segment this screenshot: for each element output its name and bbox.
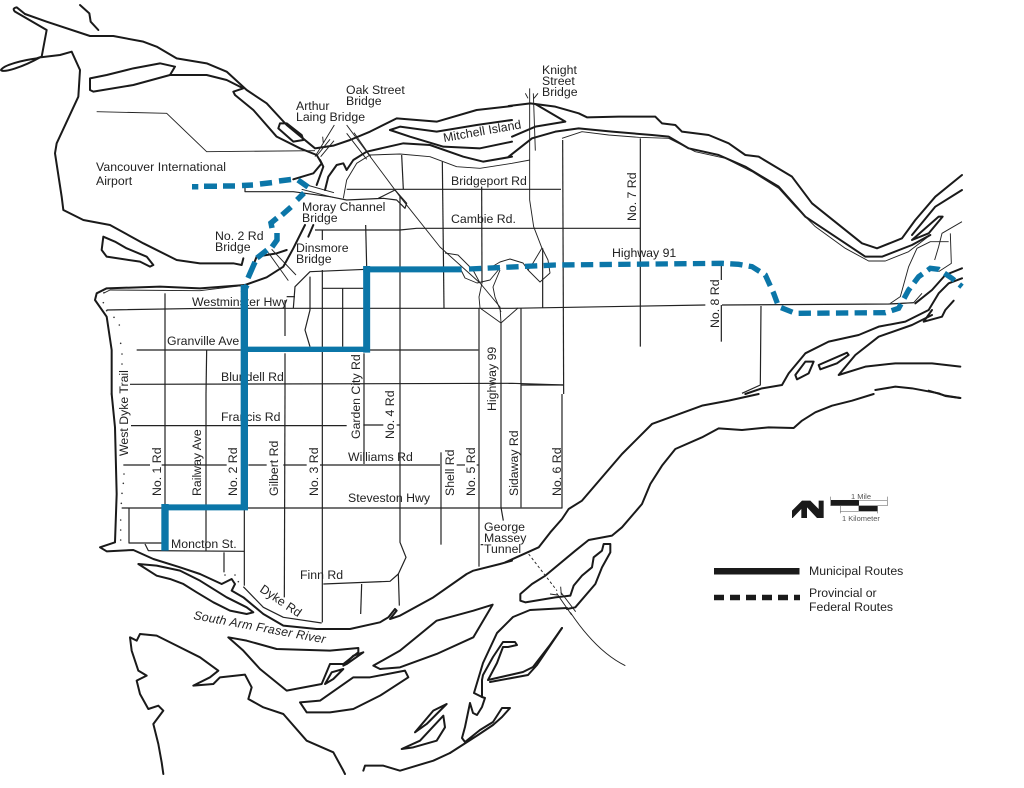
labels: bridges and places: Moray Channel — [302, 200, 385, 214]
labels: horizontal roads: South Arm Fraser River — [192, 608, 328, 647]
labels: bridges and places: No. 2 Rd — [215, 229, 264, 243]
scale labels: 1 Kilometer — [842, 514, 880, 523]
labels: vertical roads: No. 6 Rd — [550, 447, 564, 496]
labels: vertical roads: Gilbert Rd — [267, 440, 281, 496]
municipal routes in blue — [162, 266, 462, 551]
roads: south — [122, 394, 562, 623]
shorelines: north-west — [1, 5, 512, 394]
labels: horizontal roads: Moncton St. — [171, 537, 237, 551]
bridge: Oak Street — [347, 133, 371, 159]
labels: vertical roads: Railway Ave — [190, 429, 204, 496]
provincial or federal routes: Highway 91 — [469, 263, 962, 313]
labels: bridges and places: Oak Street — [346, 83, 405, 97]
labels: bridges and places: Knight — [542, 63, 577, 77]
labels: vertical roads: No. 4 Rd — [383, 390, 397, 439]
labels: bridges and places: George — [484, 520, 525, 534]
roads: north-west — [107, 155, 705, 394]
labels: bridges and places: Bridge — [302, 211, 338, 225]
labels: horizontal roads: Cambie Rd. — [451, 212, 516, 226]
labels: bridges and places: Bridge — [346, 94, 382, 108]
shorelines: south-west — [100, 394, 512, 774]
labels: bridges and places: Laing Bridge — [296, 110, 365, 124]
shorelines: south-east — [505, 391, 960, 609]
labels: horizontal roads: Steveston Hwy — [348, 491, 431, 505]
labels: bridges and places: Mitchell Island — [442, 117, 522, 145]
labels: vertical roads: No. 1 Rd — [150, 447, 164, 496]
labels: vertical roads: Garden City Rd — [349, 354, 363, 439]
labels: horizontal roads: Highway 91 — [612, 246, 676, 260]
scale labels — [842, 492, 880, 523]
labels: bridges and places: Arthur — [296, 99, 330, 113]
labels: bridges and places: Street — [542, 74, 575, 88]
labels: vertical roads: Sidaway Rd — [507, 430, 521, 496]
labels: vertical roads: No. 3 Rd — [307, 447, 321, 496]
labels: horizontal roads — [167, 174, 676, 647]
thin lines: airport, highways, bridges — [97, 88, 962, 666]
labels: vertical roads: No. 2 Rd — [226, 447, 240, 496]
labels: bridges and places: Bridge — [296, 252, 332, 266]
shorelines: north-east — [509, 103, 962, 398]
labels: horizontal roads: Finn Rd — [300, 568, 343, 582]
labels: vertical roads: West Dyke Trail — [117, 370, 131, 456]
legend: municipal routes — [714, 564, 903, 578]
labels: vertical roads: Shell Rd — [443, 449, 457, 496]
bridge: Arthur Laing — [315, 125, 334, 157]
dotted dyke trails — [103, 292, 239, 582]
labels: vertical roads: No. 5 Rd — [464, 447, 478, 496]
labels: horizontal roads: Francis Rd — [221, 410, 281, 424]
labels: bridges and places: Bridge — [542, 85, 578, 99]
labels: vertical roads: Highway 99 — [485, 347, 499, 411]
labels: horizontal roads: Williams Rd — [348, 450, 413, 464]
labels: vertical roads — [117, 172, 722, 496]
legend and scale — [714, 492, 903, 614]
bridge: Moray Channel — [302, 184, 334, 197]
scale bar — [831, 497, 887, 513]
labels: bridges and places: Vancouver International — [96, 160, 226, 174]
labels: vertical roads: No. 8 Rd — [708, 279, 722, 328]
labels: vertical roads: No. 7 Rd — [625, 172, 639, 221]
labels: bridges and places — [96, 63, 578, 556]
legend: provincial or federal routes: Federal Routes — [809, 600, 893, 614]
labels: horizontal roads: Dyke Rd — [257, 582, 304, 620]
scale labels: 1 Mile — [851, 492, 871, 501]
labels: horizontal roads: Granville Ave — [167, 334, 239, 348]
bridge: No. 2 Rd — [268, 249, 296, 281]
labels: bridges and places: Massey — [484, 531, 527, 545]
labels: horizontal roads: Westminster Hwy — [192, 295, 288, 309]
road network — [97, 88, 962, 666]
labels: horizontal roads: Bridgeport Rd — [451, 174, 527, 188]
bridge: Massey — [550, 587, 576, 615]
bridge: Knight Street — [525, 93, 538, 151]
labels: bridges and places: Bridge — [215, 240, 251, 254]
provincial or federal routes: airport to No. 2 Rd — [192, 180, 308, 293]
labels: bridges and places: Airport — [96, 174, 133, 188]
labels: bridges and places: Tunnel — [484, 542, 521, 556]
legend: municipal routes: Municipal Routes — [809, 564, 903, 578]
labels: horizontal roads: Blundell Rd — [221, 370, 284, 384]
legend: provincial or federal routes — [714, 586, 893, 614]
legend: provincial or federal routes: Provincial or — [809, 586, 877, 600]
north arrow — [792, 501, 824, 518]
shorelines: south-central islands — [450, 608, 567, 753]
roads: north-east — [521, 138, 914, 394]
labels: bridges and places: Dinsmore — [296, 241, 349, 255]
